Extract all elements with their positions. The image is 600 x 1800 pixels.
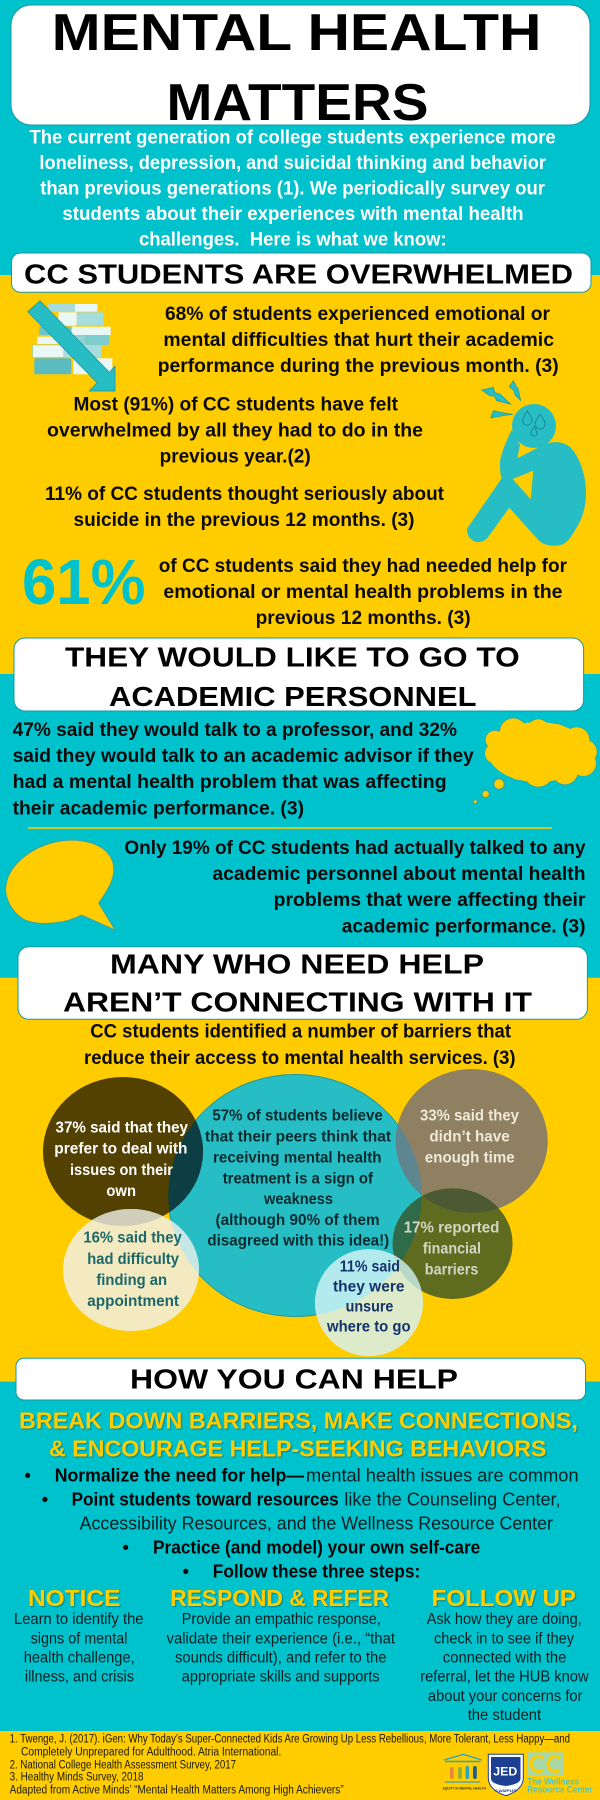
- circle: 33 percent not enough time: didn’t have: [429, 1129, 510, 1146]
- stat: 47 and 32 percent: said they would talk to an academic advisor if they: [13, 745, 474, 767]
- barriers intro text: [84, 1021, 516, 1069]
- stat: 68 percent: mental difficulties that hurt their academic: [163, 329, 554, 351]
- heading: academic personnel: [14, 638, 584, 712]
- stat: 91 percent: overwhelmed by all they had to do in the: [47, 420, 423, 442]
- logo: JED campus: CAMPUS: [495, 1789, 517, 1793]
- heading: academic personnel: ACADEMIC PERSONNEL: [109, 681, 476, 712]
- bullet list: mental health issues are common: [306, 1466, 579, 1486]
- references: [10, 1734, 570, 1796]
- stat: 19 percent: Only 19% of CC students had actually talked to any: [124, 837, 586, 859]
- step: follow up: [420, 1585, 589, 1724]
- logo: equity in mental health: EQUITY IN MENTAL HEALTH: [443, 1785, 486, 1790]
- circle: 57 percent peers: disagreed with this idea!): [207, 1233, 389, 1250]
- stat: 47 and 32 percent: 47% said they would talk to a professor, and 32%: [13, 719, 457, 741]
- step: respond and refer: [166, 1585, 396, 1686]
- icon: speech bubble: [6, 840, 115, 930]
- circle: 37 percent on their own: [43, 1077, 203, 1226]
- circle: 17 percent financial barriers: [392, 1188, 513, 1299]
- panel: how you can help: [0, 1358, 600, 1732]
- bullet list: •: [183, 1561, 189, 1581]
- logo: the wellness resource center: The Wellness: [527, 1776, 579, 1787]
- intro text: [30, 126, 556, 250]
- intro text: The current generation of college students experience more: [30, 126, 556, 148]
- subheading: break down barriers: & ENCOURAGE HELP-SEEKING BEHAVIORS: [49, 1436, 546, 1462]
- step: follow up: FOLLOW UP: [432, 1585, 576, 1611]
- circle: 57 percent peers: weakness: [263, 1191, 333, 1208]
- icon: stressed person: [467, 381, 586, 546]
- heading: many who need help: MANY WHO NEED HELP: [110, 948, 484, 979]
- subheading: break down barriers: BREAK DOWN BARRIERS, MAKE CONNECTIONS,: [19, 1407, 578, 1433]
- chart: overlapping barrier circles: [43, 1069, 548, 1356]
- stat: 11 percent: 11% of CC students thought seriously about: [45, 483, 444, 505]
- references: 3. Healthy Minds Survey, 2018: [10, 1772, 143, 1784]
- heading: academic personnel: THEY WOULD LIKE TO GO TO: [65, 642, 520, 673]
- references: 2. National College Health Assessment Survey, 2017: [10, 1759, 236, 1771]
- title: MENTAL HEALTH: [52, 4, 541, 62]
- stat: 19 percent: academic personnel about mental health: [212, 863, 586, 885]
- step: follow up: connected with the: [443, 1649, 566, 1666]
- stat: 19 percent: [124, 837, 586, 938]
- circle: 57 percent peers: treatment is a sign of: [223, 1171, 374, 1188]
- step: respond and refer: validate their experience (i.e., “that: [166, 1630, 396, 1647]
- circle: 16 percent appointment: had difficulty: [87, 1251, 179, 1268]
- stat: 19 percent: problems that were affecting their: [274, 889, 586, 911]
- title: MATTERS: [166, 74, 428, 132]
- bullet list: Practice (and model) your own self-care: [153, 1537, 480, 1557]
- circle: 37 percent on their own: prefer to deal with: [54, 1141, 187, 1158]
- bullet list: •: [24, 1466, 31, 1486]
- circle: 37 percent on their own: issues on their: [70, 1162, 173, 1179]
- icon: thought cloud: [473, 718, 597, 804]
- stat: 11 percent: [45, 483, 444, 531]
- step: notice: illness, and crisis: [25, 1669, 134, 1686]
- stat: 61 percent description: of CC students said they had needed help for: [159, 555, 567, 577]
- stat: 61 percent description: [159, 555, 567, 629]
- circle: 17 percent financial barriers: financial: [423, 1241, 481, 1258]
- circle: 11 percent unsure where to go: where to go: [326, 1319, 411, 1336]
- circle: 11 percent unsure where to go: they were: [333, 1279, 405, 1296]
- panel: many who need help: [0, 947, 600, 1382]
- circle: 33 percent not enough time: [396, 1069, 548, 1213]
- logo: equity in mental health: [443, 1754, 486, 1790]
- circle: 57 percent peers: 57% of students believe: [212, 1108, 383, 1125]
- stat: 19 percent: academic performance. (3): [342, 916, 586, 938]
- logo: JED campus: [488, 1754, 523, 1796]
- step: follow up: referral, let the HUB know: [420, 1669, 589, 1686]
- stat: 68 percent: 68% of students experienced emotional or: [165, 303, 550, 325]
- title: [11, 4, 590, 132]
- intro text: loneliness, depression, and suicidal thinking and behavior: [39, 152, 546, 174]
- step: notice: [14, 1585, 144, 1686]
- panel: CC students are overwhelmed: [0, 253, 600, 674]
- heading: many who need help: [18, 947, 587, 1019]
- step: respond and refer: Provide an empathic response,: [182, 1611, 381, 1628]
- bullet list: like the Counseling Center,: [344, 1490, 561, 1510]
- stat: 11 percent: suicide in the previous 12 months. (3): [74, 509, 414, 531]
- step: follow up: Ask how they are doing,: [427, 1611, 582, 1628]
- intro text: challenges. Here is what we know:: [139, 228, 447, 250]
- stat: 47 and 32 percent: [13, 719, 474, 820]
- barriers intro text: CC students identified a number of barriers that: [90, 1021, 511, 1043]
- bullet list: Normalize the need for help—: [55, 1466, 304, 1486]
- stat: 47 and 32 percent: their academic performance. (3): [13, 798, 304, 820]
- step: notice: health challenge,: [24, 1649, 135, 1666]
- circle: 16 percent appointment: appointment: [87, 1293, 179, 1310]
- step: respond and refer: RESPOND & REFER: [170, 1585, 390, 1611]
- step: follow up: about your concerns for: [428, 1688, 582, 1705]
- step: respond and refer: sounds difficult), and refer to the: [175, 1649, 386, 1666]
- circle: 57 percent peers: (although 90% of them: [216, 1212, 380, 1229]
- circle: 17 percent financial barriers: 17% reported: [404, 1220, 499, 1237]
- circle: 11 percent unsure where to go: unsure: [346, 1299, 394, 1316]
- stat: 61 percent description: previous 12 months. (3): [256, 607, 471, 629]
- circle: 16 percent appointment: 16% said they: [83, 1230, 182, 1247]
- heading: overwhelmed: [12, 253, 591, 292]
- references: Adapted from Active Minds’ “Mental Health Matters Among High Achievers”: [10, 1784, 344, 1796]
- step: respond and refer: appropriate skills and supports: [182, 1669, 380, 1686]
- step: notice: NOTICE: [28, 1585, 120, 1611]
- circle: 33 percent not enough time: 33% said they: [420, 1108, 519, 1125]
- stat: 47 and 32 percent: had a mental health problem that was affecting: [13, 771, 447, 793]
- stat: 61 percent description: emotional or mental health problems in the: [163, 581, 563, 603]
- bullet list: •: [122, 1537, 129, 1557]
- panel: introduction: [0, 0, 600, 275]
- circle: 37 percent on their own: 37% said that they: [56, 1120, 188, 1137]
- circle: 37 percent on their own: own: [106, 1183, 136, 1200]
- stat: 91 percent: [47, 394, 423, 468]
- stat: 68 percent: performance during the previous month. (3): [158, 355, 559, 377]
- logo: the wellness resource center: [527, 1752, 593, 1796]
- heading: many who need help: AREN’T CONNECTING WITH IT: [63, 987, 532, 1018]
- heading: how you can help: [16, 1358, 586, 1400]
- step: follow up: the student: [468, 1707, 542, 1724]
- circle: 16 percent appointment: [63, 1209, 199, 1331]
- bullet list: •: [42, 1490, 48, 1510]
- heading: overwhelmed: CC STUDENTS ARE OVERWHELMED: [24, 258, 573, 289]
- circle: 17 percent financial barriers: barriers: [425, 1262, 478, 1279]
- logo: JED campus: JED: [493, 1765, 518, 1779]
- circle: 57 percent peers: that their peers think that: [205, 1129, 391, 1146]
- bullet list: [24, 1466, 579, 1581]
- subheading: break down barriers: [19, 1407, 578, 1462]
- bullet list: Accessibility Resources, and the Wellness Resource Center: [80, 1514, 553, 1534]
- circle: 11 percent unsure where to go: [315, 1249, 423, 1356]
- step: follow up: check in to see if they: [434, 1630, 574, 1647]
- intro text: than previous generations (1). We periodically survey our: [40, 177, 545, 199]
- intro text: students about their experiences with mental health: [62, 203, 524, 225]
- stat: 91 percent: Most (91%) of CC students have felt: [74, 394, 398, 416]
- stat: 91 percent: previous year.(2): [160, 446, 311, 468]
- circle: 57 percent peers: [168, 1074, 422, 1316]
- stat: 68 percent: [158, 303, 559, 377]
- bullet list: Follow these three steps:: [213, 1561, 420, 1581]
- circle: 11 percent unsure where to go: 11% said: [340, 1259, 400, 1276]
- references: Completely Unprepared for Adulthood. Atria International.: [21, 1747, 281, 1759]
- circle: 16 percent appointment: finding an: [96, 1272, 167, 1289]
- step: notice: Learn to identify the: [14, 1611, 144, 1628]
- barriers intro text: reduce their access to mental health services. (3): [84, 1047, 516, 1069]
- circle: 57 percent peers: receiving mental health: [213, 1150, 382, 1167]
- heading: how you can help: HOW YOU CAN HELP: [130, 1363, 458, 1394]
- big number: 61 percent: 61%: [22, 546, 145, 618]
- bullet list: Point students toward resources: [72, 1490, 339, 1510]
- panel: footer references and logos: [0, 1731, 600, 1800]
- step: notice: signs of mental: [31, 1630, 127, 1647]
- icon: books with down arrow: [28, 301, 115, 391]
- circle: 33 percent not enough time: enough time: [425, 1150, 515, 1167]
- panel: they would like to go to academic personnel: [0, 638, 600, 978]
